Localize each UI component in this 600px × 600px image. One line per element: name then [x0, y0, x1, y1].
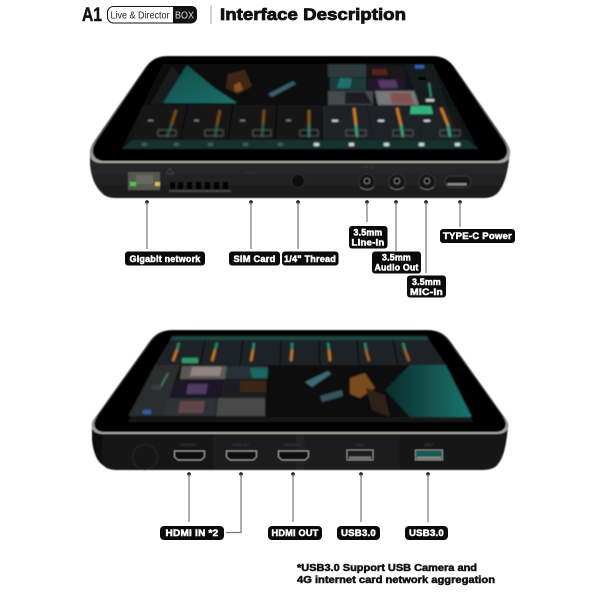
header [82, 5, 406, 26]
port captions [181, 443, 434, 447]
title: Interface Description [220, 5, 406, 24]
channel strips [155, 340, 446, 365]
port captions: USB 1 [355, 443, 365, 447]
main video [143, 64, 329, 105]
callout: TYPE-C Power [440, 200, 515, 243]
device body [90, 150, 510, 198]
device: top view with rear ports [90, 56, 510, 198]
footnote: *USB3.0 Support USB Camera and [297, 563, 477, 574]
callout: 1/4" Thread [282, 200, 338, 266]
jacks [359, 174, 435, 190]
callout: 3.5mm MIC-in: MIC-in [410, 287, 443, 297]
callout: USB3.0: USB3.0 [341, 528, 376, 538]
callout: 3.5mm Audio Out [372, 200, 421, 274]
callout: 3.5mm Audio Out: 3.5mm [382, 252, 411, 262]
callout: 3.5mm MIC-in: 3.5mm [412, 277, 441, 287]
footnote: 4G internet card network aggregation [297, 575, 495, 586]
Ethernet port [128, 172, 160, 190]
vent slots [166, 168, 231, 192]
port labels on body: SIM/TF [245, 171, 257, 175]
thumbnails [328, 64, 366, 77]
footnote [297, 563, 495, 586]
callout: Gigabit network [125, 200, 205, 266]
screen [128, 336, 473, 422]
callout: 1/4" Thread: 1/4" Thread [284, 254, 336, 264]
channel strips [132, 105, 468, 140]
callout: 3.5mm Line-in: 3.5mm [354, 228, 382, 238]
bezel and silver rim [92, 330, 508, 434]
callout: HDMI IN *2 [160, 472, 243, 540]
callout: Gigabit network: Gigabit network [130, 254, 201, 264]
callout: SIM Card: SIM Card [234, 254, 276, 264]
badge: Live & Director BOX [108, 6, 197, 23]
model name: A1 [82, 5, 102, 26]
callouts: top device [125, 200, 515, 298]
callout: 3.5mm Audio Out: Audio Out [374, 262, 418, 272]
device: bottom view with HDMI/USB [92, 330, 508, 470]
thread mount [292, 174, 304, 188]
audio panel [405, 64, 447, 105]
callout: USB3.0 second port: USB3.0 [409, 528, 444, 538]
callouts: bottom device [160, 472, 448, 540]
callout: 3.5mm Line-in [349, 200, 388, 248]
badge: Live & Director BOX: Live & Director [110, 10, 170, 21]
port labels on body [245, 165, 374, 175]
callout: HDMI OUT [268, 472, 322, 540]
port captions: HDMI OUT [284, 443, 303, 447]
screen [122, 64, 478, 149]
device body [92, 425, 508, 470]
divider [210, 5, 212, 24]
port captions: HDMI IN 1 [181, 443, 197, 447]
callout: TYPE-C Power: TYPE-C Power [443, 231, 512, 241]
green button [410, 106, 433, 114]
fader knobs [158, 130, 460, 136]
callout: HDMI IN *2: HDMI IN *2 [166, 528, 218, 538]
callout: 3.5mm Line-in: Line-in [352, 238, 384, 248]
port captions: USB 2 [424, 443, 434, 447]
badge: Live & Director BOX: BOX [175, 10, 194, 21]
USB ports [347, 450, 442, 460]
main video [265, 365, 472, 417]
HDMI ports [174, 451, 308, 460]
thumbnails [180, 366, 227, 379]
faders [167, 108, 450, 137]
callout: USB3.0 [337, 472, 380, 540]
port captions: HDMI IN 2 [233, 443, 249, 447]
bottom toolbar [122, 140, 478, 149]
audio panel [128, 365, 180, 416]
callout: SIM Card [229, 200, 280, 266]
status bar [128, 417, 473, 422]
callout: HDMI OUT: HDMI OUT [272, 528, 319, 538]
port labels on body: LINE IN [361, 165, 374, 169]
callout: 3.5mm MIC-in [407, 200, 446, 298]
strip buttons [148, 120, 430, 122]
power button ring [132, 444, 158, 470]
USB-C port [445, 176, 471, 188]
faders [173, 343, 409, 361]
green button [182, 358, 198, 363]
callout: USB3.0 second port [405, 472, 448, 540]
top toolbar [170, 336, 429, 340]
bezel and silver rim [90, 56, 510, 163]
